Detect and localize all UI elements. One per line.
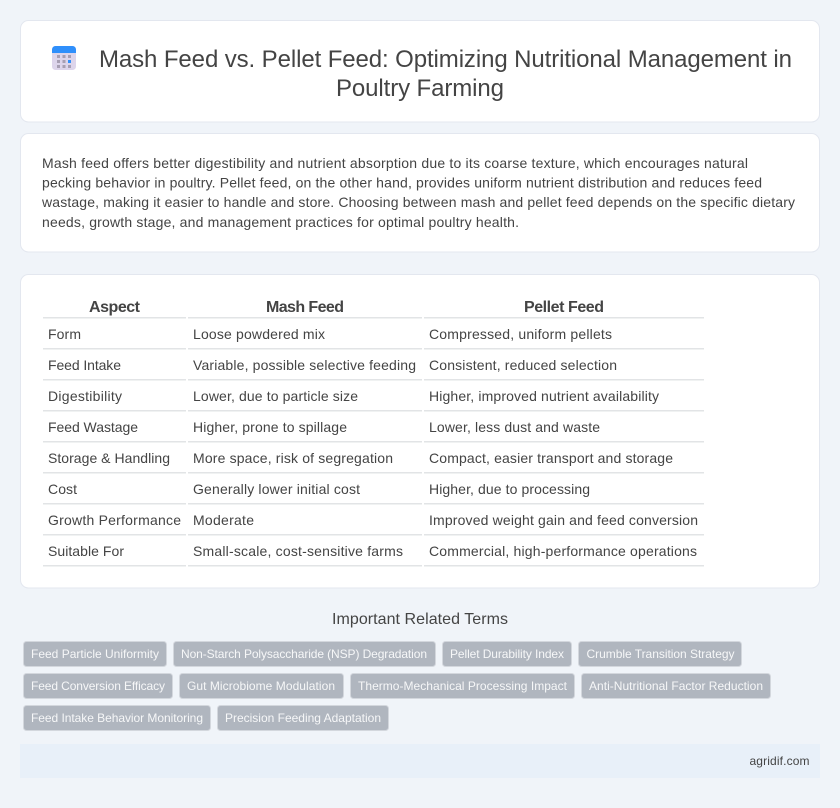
table header <box>43 299 704 318</box>
text block: description: needs, growth stage, and management practices for optimal poultry health. <box>42 214 519 230</box>
panel: comparison table <box>20 274 820 588</box>
text block: description: wastage, making it easier to handle and store. Choosing between mash and pellet feed depends on the specific dietary <box>41 194 795 210</box>
table row: Suitable For: Commercial, high-performance operations <box>429 543 697 559</box>
tag: Gut Microbiome Modulation <box>180 674 344 698</box>
table row: Suitable For: Small-scale, cost-sensitive farms <box>193 543 403 559</box>
table row: Storage and Handling <box>43 450 704 474</box>
table row: Feed Wastage: Lower, less dust and waste <box>429 419 600 435</box>
tag: Gut Microbiome Modulation: Gut Microbiome Modulation <box>187 679 335 693</box>
table row: Cost: Cost <box>48 481 77 497</box>
table row: Storage and Handling: Storage & Handling <box>48 450 170 466</box>
text block: description: Mash feed offers better digestibility and nutrient absorption due to its coarse texture, which encourages natural <box>42 155 748 171</box>
table row: Form: Compressed, uniform pellets <box>429 326 612 342</box>
tag: Anti-Nutritional Factor Reduction <box>582 674 770 698</box>
tag: Crumble Transition Strategy <box>578 642 742 666</box>
tag: Pellet Durability Index: Pellet Durability Index <box>450 647 564 661</box>
table row: Feed Intake: Variable, possible selective feeding <box>193 357 416 373</box>
tag: NSP Degradation: Non-Starch Polysaccharide (NSP) Degradation <box>181 647 427 661</box>
table row: Growth Performance: Moderate <box>193 512 254 528</box>
table row: Growth Performance <box>43 512 704 536</box>
title: Poultry Farming <box>336 75 504 102</box>
table row: Feed Wastage <box>43 419 704 442</box>
panel: description <box>20 134 820 252</box>
tag: Crumble Transition Strategy: Crumble Transition Strategy <box>586 647 734 661</box>
table row: Form <box>43 326 704 350</box>
heading: related terms: Important Related Terms <box>332 611 508 628</box>
table row: Cost <box>43 481 704 504</box>
title: Mash Feed vs. Pellet Feed: Optimizing Nutritional Management in <box>99 46 792 73</box>
table row: Feed Intake: Feed Intake <box>48 357 121 373</box>
table header: Aspect <box>89 299 141 316</box>
table row: Suitable For: Suitable For <box>48 543 124 559</box>
table row: Digestibility: Higher, improved nutrient availability <box>429 388 659 404</box>
table row: Storage and Handling: More space, risk of segregation <box>193 450 393 466</box>
tag: Feed Particle Uniformity <box>24 642 166 666</box>
tag: Feed Intake Behavior Monitoring <box>24 706 210 730</box>
tag: NSP Degradation <box>174 642 436 666</box>
panel: header <box>20 20 820 122</box>
icon: calendar <box>52 46 76 70</box>
related term tags <box>24 642 770 730</box>
text block: description: pecking behavior in poultry. Pellet feed, on the other hand, provides uniform nutrient distribution and reduces feed <box>42 175 762 191</box>
text block: description <box>41 155 795 230</box>
footer <box>20 744 820 778</box>
table row: Form: Form <box>48 326 81 342</box>
tag: Precision Feeding Adaptation <box>218 706 388 730</box>
table row: Feed Intake: Consistent, reduced selection <box>429 357 617 373</box>
tag: Feed Intake Behavior Monitoring: Feed Intake Behavior Monitoring <box>31 711 203 725</box>
table row: Cost: Generally lower initial cost <box>193 481 360 497</box>
table header: Pellet Feed <box>524 299 604 316</box>
table row: Suitable For <box>43 543 704 566</box>
table row: Digestibility: Lower, due to particle size <box>193 388 358 404</box>
title <box>99 46 792 102</box>
table row: Digestibility <box>43 388 704 412</box>
tag: Feed Particle Uniformity: Feed Particle Uniformity <box>31 647 159 661</box>
table row: Storage and Handling: Compact, easier transport and storage <box>429 450 673 466</box>
table row: Form: Loose powdered mix <box>193 326 325 342</box>
tag: Feed Conversion Efficacy <box>24 674 172 698</box>
tag: Anti-Nutritional Factor Reduction: Anti-Nutritional Factor Reduction <box>589 679 763 693</box>
table row: Feed Intake <box>43 357 704 380</box>
table row: Feed Wastage: Higher, prone to spillage <box>193 419 347 435</box>
tag: Thermo-Mechanical Processing Impact: Thermo-Mechanical Processing Impact <box>358 679 568 693</box>
table row: Growth Performance: Growth Performance <box>48 512 181 528</box>
table row: Growth Performance: Improved weight gain and feed conversion <box>429 512 698 528</box>
tag: Precision Feeding Adaptation: Precision Feeding Adaptation <box>225 711 381 725</box>
footer: agridif.com <box>750 754 810 768</box>
table row: Digestibility: Digestibility <box>48 388 122 404</box>
tag: Feed Conversion Efficacy: Feed Conversion Efficacy <box>31 679 165 693</box>
table row: Cost: Higher, due to processing <box>429 481 590 497</box>
table row: Feed Wastage: Feed Wastage <box>48 419 138 435</box>
table header: Mash Feed <box>266 299 344 316</box>
tag: Pellet Durability Index <box>442 642 572 666</box>
tag: Thermo-Mechanical Processing Impact <box>350 674 574 698</box>
